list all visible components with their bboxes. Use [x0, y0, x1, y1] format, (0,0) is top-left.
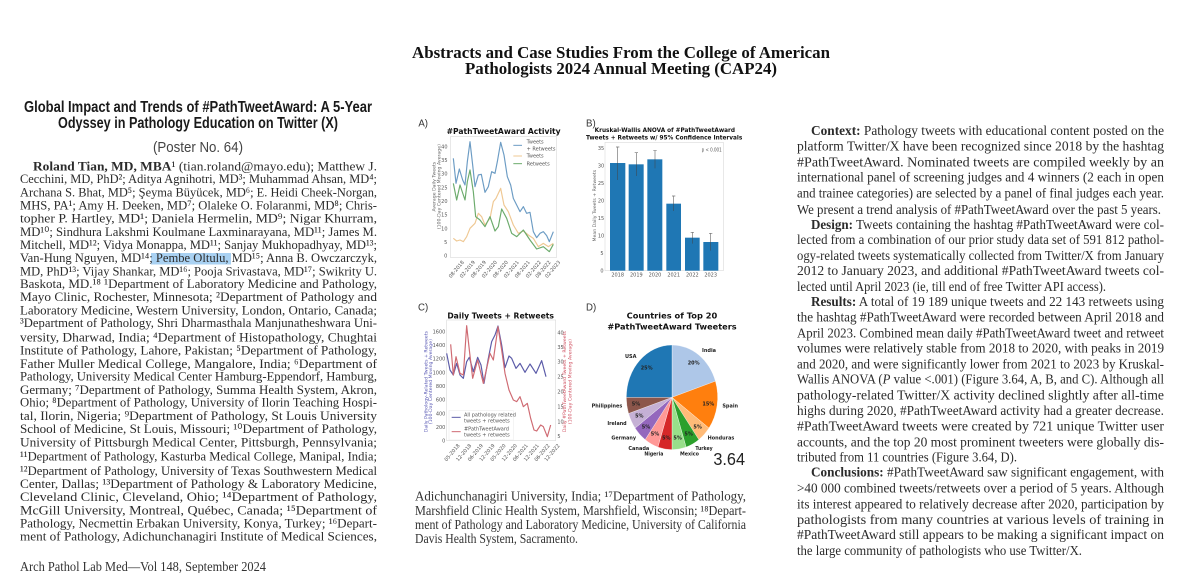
pie country labels: Honduras — [708, 435, 734, 441]
authors and affiliations text, left column: Pathology, University Medical Center Hamburg-Eppendorf, Hamburg, — [20, 369, 377, 384]
chart B plot area — [605, 142, 723, 271]
pie percentage labels — [632, 361, 714, 442]
affiliations continuation, middle column — [415, 489, 746, 546]
chart B y axis: 30 — [598, 163, 604, 169]
chart C legend: tweets + retweets — [464, 419, 510, 425]
chart B year labels: 2022 — [686, 272, 699, 278]
chart B y axis: 35 — [598, 146, 604, 152]
chart B y axis: 15 — [598, 216, 604, 222]
authors and affiliations text, left column: Archana S. Bhat, MD⁵; Şeyma Büyücek, MD⁶; E. Heidi Cheek-Norgan, — [20, 184, 377, 200]
line: tweets + retweets — [453, 142, 553, 242]
chart B y axis: 25 — [598, 181, 604, 187]
authors and affiliations text, left column: Laboratory Medicine, Western University, London, Ontario, Canada; — [20, 302, 377, 318]
chart C left axis: 1200 — [433, 357, 445, 363]
conclusions paragraph: pathologists from many countries at various levels of training in — [797, 513, 1164, 528]
results paragraph: April 2023. Combined mean daily #PathTweetAward tweet and retweet — [797, 327, 1164, 342]
panel letter A: A) — [418, 118, 428, 129]
chart B year labels — [611, 272, 717, 278]
p value note: p < 0.001 — [702, 148, 722, 154]
pie percentage labels: 5% — [662, 436, 671, 442]
chart B y axis: 5 — [600, 251, 604, 257]
design paragraph — [797, 218, 1164, 295]
chart C x axis dates — [444, 443, 562, 463]
chart B title: Tweets + Retweets w/ 95% Confidence Intervals — [586, 134, 743, 141]
chart C x axis dates: 06-2021 — [512, 443, 530, 463]
chart C right axis: 40 — [557, 330, 564, 336]
chart C x axis dates: 12-2018 — [455, 443, 473, 463]
pie country labels: USA — [625, 354, 637, 360]
authors and affiliations text, left column: Pathology, Necmettin Erbakan University, Konya, Turkey; ¹⁶Depart- — [20, 516, 377, 531]
pie country labels: Turkey — [695, 446, 713, 452]
authors and affiliations text, left column: ³Department of Pathology, Shri Dharmasthala Manjunatheshwara Uni- — [20, 315, 377, 330]
chart D title — [607, 312, 737, 331]
chart B year labels: 2018 — [611, 272, 624, 278]
authors and affiliations text, left column: Roland Tian, MD, MBA ¹ (tian.roland@mayo.edu); Matthew J. — [33, 158, 377, 173]
authors and affiliations text, left column: Father Muller Medical College, Mangalore, India; ⁶Department of — [20, 356, 378, 371]
pie country labels: Mexico — [680, 452, 700, 458]
affiliations continuation, middle column: Davis Health System, Sacramento. — [415, 531, 578, 546]
authors and affiliations text, left column: Cecchini, MD, PhD²; Aditya Agnihotri, MD³; Muhammad Ahsan, MD⁴; — [20, 171, 377, 186]
journal section heading: Pathologists 2024 Annual Meeting (CAP24) — [465, 59, 777, 78]
chart C left axis: 600 — [436, 398, 445, 404]
pie country labels: Germany — [611, 435, 637, 441]
authors and affiliations text, left column: Van-Hung Nguyen, MD¹⁴; Pembe Oltulu, MD¹⁵; Anna B. Owczarczyk, — [20, 250, 377, 265]
authors and affiliations text, left column: Baskota, MD.¹⁸ ¹Department of Laboratory Medicine and Pathology, — [20, 276, 377, 291]
chart C legend: #PathTweetAward — [464, 426, 509, 432]
abstract title: Global Impact and Trends of #PathTweetAward: A 5-Year — [24, 99, 372, 116]
chart B y axis: 20 — [598, 198, 604, 204]
conclusions paragraph: its interest appeared to relatively decrease after 2020, participation by — [797, 497, 1164, 512]
chart A legend: Tweets — [526, 154, 544, 160]
line: retweets — [453, 170, 553, 252]
chart B y axis — [592, 146, 604, 274]
chart A y axis — [431, 144, 448, 259]
authors and affiliations text, left column: University of Pittsburgh Medical Center, Pittsburgh, Pennsylvania; — [20, 434, 377, 449]
chart C left axis: 200 — [436, 425, 445, 431]
authors and affiliations text, left column: Institute of Pathology, Lahore, Pakistan; ⁵Department of Pathology, — [20, 342, 377, 357]
abstract body, right column — [797, 124, 1164, 559]
abstract title — [24, 99, 372, 132]
chart C right axis: 20 — [557, 389, 564, 395]
chart A y axis: 25 — [441, 185, 448, 191]
context paragraph — [797, 124, 1164, 218]
panel C: dual-axis line chart — [418, 303, 573, 463]
authors and affiliations text, left column — [20, 158, 378, 543]
chart C right axis: 25 — [557, 375, 564, 381]
line: all pathology tweets — [447, 326, 546, 383]
pie country labels: Philippines — [592, 404, 622, 410]
conclusions paragraph: Conclusions: #PathTweetAward saw significant engagement, with — [811, 466, 1164, 481]
results paragraph: volumes were relatively stable from 2018 to 2020, with peaks in 2019 — [797, 342, 1164, 357]
chart B title: Kruskal-Wallis ANOVA of #PathTweetAward — [595, 127, 735, 134]
pie country labels — [592, 348, 739, 458]
chart C x axis dates: 12-2021 — [523, 443, 541, 463]
affiliations continuation, middle column: Marshfield Clinic Health System, Marshfield, Wisconsin; ¹⁸Depart- — [415, 503, 746, 518]
yearly bars — [610, 159, 718, 271]
confidence interval whiskers — [616, 147, 712, 251]
chart A y axis: Average Daily Tweets — [431, 161, 437, 212]
pie country labels: Canada — [628, 446, 649, 452]
chart C right axis: 35 — [557, 345, 564, 351]
chart A title: #PathTweetAward Activity — [447, 127, 561, 136]
context paragraph: Context: Pathology tweets with educational content posted on the — [811, 124, 1164, 139]
authors and affiliations text, left column: McGill University, Montreal, Québec, Canada; ¹⁵Department of — [20, 502, 378, 517]
chart A legend — [513, 140, 556, 167]
chart B y axis: Mean Daily Tweets + Retweets — [592, 169, 598, 242]
authors and affiliations text, left column: ment of Pathology, Adichunchanagiri Institute of Medical Sciences, — [20, 528, 377, 543]
chart C plot area — [447, 320, 556, 441]
chart A x axis dates: 08-2022 — [535, 260, 553, 280]
design paragraph: lected from a combination of our prior study data set of 591 812 pathol- — [797, 233, 1164, 248]
pie percentage labels: 5% — [651, 432, 659, 438]
pie percentage labels: 5% — [635, 414, 644, 420]
results paragraph: tributed from 11 countries (Figure 3.64, D). — [797, 451, 1017, 466]
chart A x axis dates — [448, 260, 562, 280]
authors and affiliations text, left column: tal, Ilorin, Nigeria; ⁹Department of Pathology, St Louis University — [20, 408, 378, 423]
context paragraph: We present a trend analysis of #PathTweetAward over the past 5 years. — [797, 203, 1161, 218]
authors and affiliations text, left column: versity, Dharwad, India; ⁴Department of Histopathology, Chughtai — [20, 330, 377, 345]
chart A y axis: 5 — [444, 240, 447, 246]
chart C legend: tweets + retweets — [464, 432, 510, 438]
pie percentage labels: 15% — [702, 401, 714, 407]
chart C right axis: 15 — [557, 404, 564, 410]
figure number: 3.64 — [713, 449, 745, 469]
affiliations continuation, middle column: Adichunchanagiri University, India; ¹⁷Department of Pathology, — [415, 489, 746, 504]
design paragraph: 2012 to January 2023, and additional #PathTweetAward tweets col- — [797, 264, 1164, 279]
chart A x axis dates: 02-2021 — [503, 260, 521, 280]
results paragraph: accounts, and the top 20 most prominent tweeters were globally dis- — [797, 436, 1164, 451]
panel B: bar chart — [586, 118, 743, 278]
pie slices — [626, 345, 718, 450]
results paragraph: Results: A total of 19 189 unique tweets and 22 143 retweets using — [811, 295, 1164, 310]
authors and affiliations text, left column: School of Medicine, St Louis, Missouri; ¹⁰Department of Pathology, — [20, 421, 377, 436]
chart A x axis dates: 02-2023 — [544, 260, 562, 280]
panel letter C: C) — [418, 303, 428, 314]
chart C title: Daily Tweets + Retweets — [447, 311, 554, 320]
chart B year labels: 2021 — [667, 272, 680, 278]
journal section heading — [412, 43, 831, 78]
chart C x axis dates: 05-2020 — [490, 443, 508, 463]
pie percentage labels: 5% — [632, 401, 640, 407]
chart C x axis dates: 12-2020 — [501, 443, 519, 463]
abstract title: Odyssey in Pathology Education on Twitter (X) — [58, 115, 338, 132]
chart B y axis: 0 — [600, 268, 604, 274]
authors and affiliations text, left column: Mayo Clinic, Rochester, Minnesota; ²Department of Pathology and — [20, 289, 377, 304]
panel letter B: B) — [586, 118, 596, 129]
chart B year labels: 2019 — [630, 272, 643, 278]
line: tweets — [453, 188, 553, 247]
panel letter D: D) — [586, 303, 596, 314]
chart C left axis: 800 — [436, 384, 445, 390]
context paragraph: international panel of screening judges and 4 winners (2 each in open — [797, 171, 1164, 186]
context paragraph: #PathTweetAward. Nominated tweets are compiled weekly by an — [797, 156, 1164, 171]
authors and affiliations text, left column: topher P. Hartley, MD¹; Daniela Hermelin, MD⁹; Nigar Khurram, — [20, 210, 377, 226]
authors and affiliations text, left column: ¹¹Department of Pathology, Kasturba Medical College, Manipal, India; — [20, 448, 377, 463]
authors and affiliations text, left column: Center, Dallas; ¹³Department of Pathology & Laboratory Medicine, — [20, 476, 377, 491]
pie percentage labels: 25% — [641, 366, 653, 372]
pie country labels: Nigeria — [644, 452, 663, 458]
chart A legend: Tweets — [526, 140, 544, 146]
line: #PathTweetAward tweets — [451, 326, 551, 437]
chart A y axis: 30 — [441, 172, 448, 178]
chart B year labels: 2020 — [649, 272, 661, 278]
chart B title — [586, 127, 743, 141]
conclusions paragraph: #PathTweetAward still appears to be making a significant impact on — [797, 528, 1164, 543]
chart A x axis dates: 08-2020 — [492, 260, 510, 280]
authors and affiliations text, left column: Germany; ⁷Department of Pathology, Summa Health System, Akron, — [20, 382, 377, 397]
chart A y axis: 0 — [444, 253, 447, 259]
results paragraph: the hashtag #PathTweetAward were recorded between April 2018 and — [797, 311, 1164, 326]
chart C left axis: 1000 — [433, 370, 445, 376]
pie percentage labels: 5% — [642, 424, 650, 430]
chart C right axis: Daily #PathTweetAward Tweets + Retweets — [562, 331, 568, 432]
conclusions paragraph — [797, 466, 1164, 559]
pie percentage labels: 20% — [688, 361, 700, 367]
chart C x axis dates: 12-2019 — [479, 443, 497, 463]
authors and affiliations text, left column: Mitchell, MD¹²; Vidya Monappa, MD¹¹; Sanjay Mukhopadhyay, MD¹³; — [20, 237, 377, 252]
chart C left axis: (100-Day Centered Moving Average) — [428, 339, 434, 424]
chart A x axis dates: 08-2019 — [470, 260, 488, 280]
chart A y axis: 20 — [441, 199, 448, 205]
chart C legend: All pathology related — [464, 413, 516, 419]
chart A x axis dates: 02-2020 — [481, 260, 499, 280]
chart C left axis — [423, 329, 445, 444]
chart C right axis: 5 — [557, 434, 561, 440]
chart A x axis dates: 08-2018 — [448, 260, 466, 280]
chart A legend: Retweets — [527, 161, 550, 167]
chart C x axis dates: 12-2022 — [544, 443, 562, 463]
pie country labels: Spain — [722, 404, 739, 410]
conclusions paragraph: the large community of pathologists who use Twitter/X. — [797, 544, 1082, 559]
chart B year labels: 2023 — [704, 272, 717, 278]
results paragraph: #PathTweetAward tweets were created by 721 unique Twitter user — [797, 420, 1164, 435]
pie country labels: India — [702, 348, 716, 354]
chart C right axis: 10 — [557, 419, 564, 425]
design paragraph: ogy-related tweets systematically collected from Twitter/X from January — [797, 249, 1164, 264]
conclusions paragraph: >40 000 combined tweets/retweets over a period of 5 years. Although — [797, 481, 1164, 496]
chart A x axis dates: 02-2022 — [525, 260, 543, 280]
chart A y axis: 35 — [441, 158, 448, 164]
chart A y axis: (100-Day Centered Moving Average) — [437, 144, 443, 229]
design paragraph: Design: Tweets containing the hashtag #PathTweetAward were col- — [811, 218, 1164, 233]
journal section heading: Abstracts and Case Studies From the College of American — [412, 43, 831, 62]
chart C left axis: Daily Pathology-Related Tweets + Retweets — [423, 331, 429, 432]
chart A x axis dates: 08-2021 — [514, 260, 532, 280]
results paragraph — [797, 295, 1164, 466]
chart A legend: + Retweets — [527, 146, 556, 152]
affiliations continuation, middle column: ment of Pathology and Laboratory Medicine, University of California — [415, 517, 746, 532]
chart B y axis: 10 — [598, 234, 604, 240]
chart C legend — [449, 411, 516, 440]
chart C left axis: 400 — [436, 411, 445, 417]
chart C right axis — [557, 330, 573, 440]
poster number: (Poster No. 64) — [153, 140, 243, 156]
authors and affiliations text, left column: MHS, PA¹; Amy H. Deeken, MD⁷; Olaleke O. Folaranmi, MD⁸; Chris- — [20, 197, 377, 212]
chart D title: #PathTweetAward Tweeters — [607, 322, 737, 331]
authors and affiliations text, left column: MD, PhD¹³; Vijay Shankar, MD¹⁶; Pooja Srivastava, MD¹⁷; Swikrity U. — [20, 264, 377, 278]
results paragraph: Wallis ANOVA (P value <.001) (Figure 3.64, A, B, and C). Although all — [797, 372, 1164, 387]
pie percentage labels: 5% — [673, 436, 682, 442]
results paragraph: and 2020, and were significantly lower from 2021 to 2023 by Kruskal- — [797, 357, 1164, 372]
chart C left axis: 1400 — [433, 343, 445, 349]
authors and affiliations text, left column: Cleveland Clinic, Cleveland, Ohio; ¹⁴Department of Pathology, — [20, 489, 377, 504]
pie percentage labels: 5% — [693, 424, 702, 430]
authors and affiliations text, left column: ¹²Department of Pathology, University of Texas Southwestern Medical — [20, 463, 377, 478]
context paragraph: platform Twitter/X have been recognized since 2018 by the hashtag — [797, 140, 1164, 155]
highlighted author name — [151, 253, 231, 264]
chart C x axis dates: 06-2019 — [467, 443, 485, 463]
chart C right axis: 30 — [557, 360, 564, 366]
chart C left axis: 1600 — [433, 329, 445, 335]
chart A y axis: 15 — [441, 213, 448, 219]
panel A: activity line chart — [418, 118, 562, 280]
chart A plot area — [450, 137, 557, 257]
panel D: pie chart — [586, 303, 745, 469]
chart C x axis dates: 06-2022 — [534, 443, 552, 463]
chart A x axis dates: 02-2019 — [459, 260, 477, 280]
results paragraph: highs during 2020, #PathTweetAward activity had a greater decrease. — [797, 404, 1164, 419]
pie country labels: Ireland — [607, 421, 627, 427]
chart C x axis dates: 05-2018 — [444, 443, 462, 463]
chart A y axis: 10 — [441, 226, 448, 232]
authors and affiliations text, left column: Ohio; ⁸Department of Pathology, University of Ilorin Teaching Hospi- — [20, 394, 377, 409]
chart D title: Countries of Top 20 — [627, 312, 718, 321]
chart C left axis: 0 — [442, 438, 445, 444]
authors and affiliations text, left column: MD¹⁰; Sindhura Lakshmi Koulmane Laxminarayana, MD¹¹; James M. — [20, 224, 377, 239]
chart C right axis: (100-Day Centered Moving Average) — [567, 339, 573, 424]
results paragraph: pathology-related Twitter/X activity declined slightly after all-time — [797, 388, 1164, 403]
pie percentage labels: 5% — [684, 432, 693, 438]
context paragraph: and trainee categories) are selected by a panel of final judges each year. — [797, 187, 1164, 202]
chart A y axis: 40 — [441, 144, 448, 150]
design paragraph: lected until April 2023 (ie, till end of free Twitter API access). — [797, 280, 1106, 295]
